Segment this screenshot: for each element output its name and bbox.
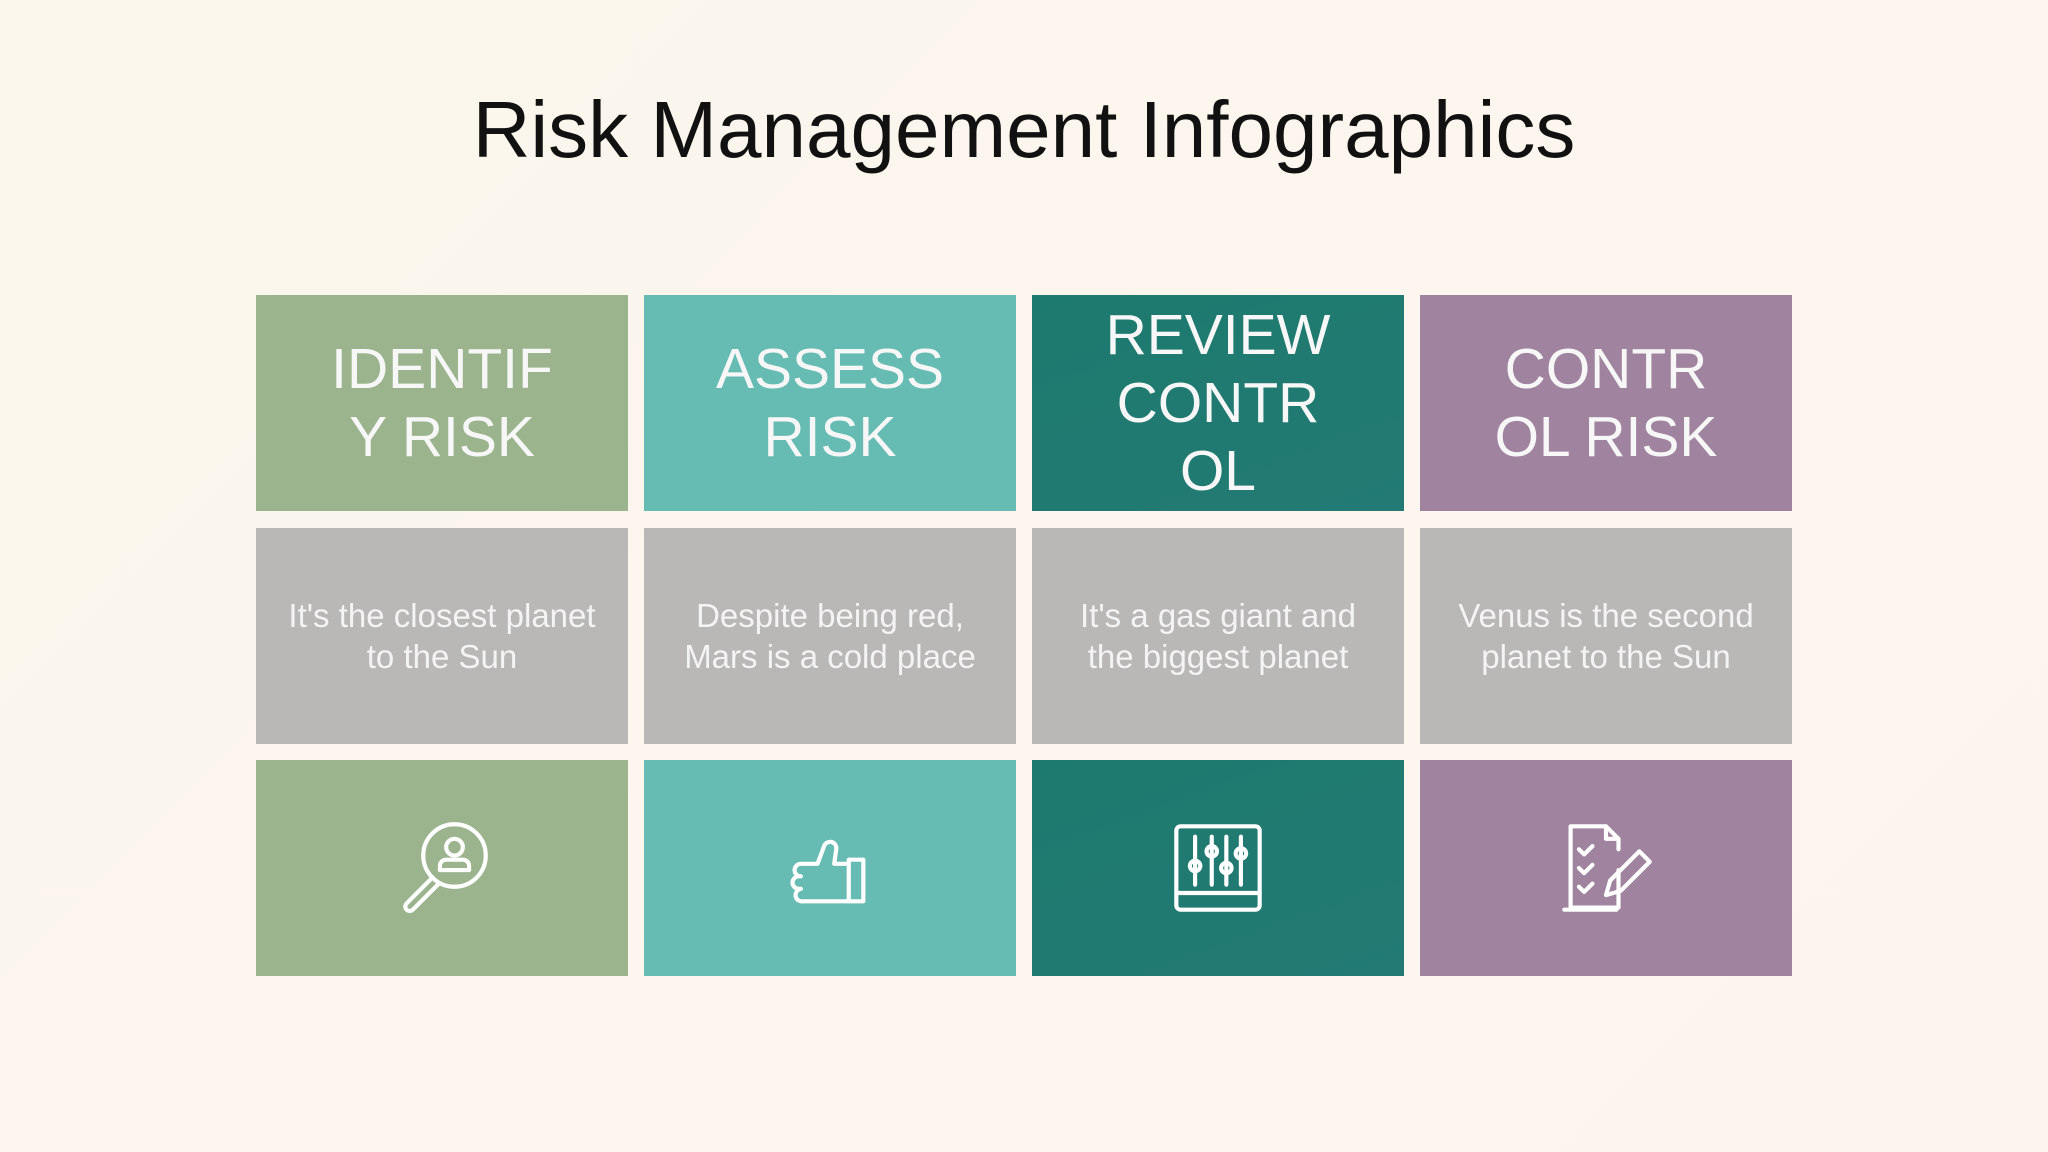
heading: identify risk: IDENTIF bbox=[331, 337, 553, 401]
heading: control risk: CONTR bbox=[1505, 337, 1707, 401]
title: Risk Management Infographics bbox=[473, 85, 1575, 174]
heading: assess risk: ASSESS bbox=[716, 337, 944, 401]
heading: identify risk bbox=[256, 295, 628, 511]
heading: control risk: OL RISK bbox=[1495, 405, 1717, 469]
text: review: It's a gas giant and bbox=[1080, 597, 1356, 634]
text: control bbox=[1420, 528, 1792, 744]
text: review bbox=[1032, 528, 1404, 744]
heading: review control bbox=[1032, 295, 1404, 511]
heading: review control: OL bbox=[1180, 439, 1256, 503]
icon panel: magnifier person bbox=[256, 760, 628, 976]
heading: assess risk bbox=[644, 295, 1016, 511]
icon panel: sliders bbox=[1032, 760, 1404, 976]
text: identify bbox=[256, 528, 628, 744]
heading: review control: REVIEW bbox=[1106, 303, 1330, 367]
heading: review control: CONTR bbox=[1117, 371, 1319, 435]
heading: identify risk: Y RISK bbox=[349, 405, 535, 469]
text: identify: It's the closest planet bbox=[288, 597, 596, 634]
text: assess: Despite being red, bbox=[696, 597, 964, 634]
text: assess bbox=[644, 528, 1016, 744]
text: assess: Mars is a cold place bbox=[684, 638, 976, 675]
heading: control risk bbox=[1420, 295, 1792, 511]
heading: assess risk: RISK bbox=[763, 405, 897, 469]
icon panel: checklist pencil bbox=[1420, 760, 1792, 976]
text: identify: to the Sun bbox=[367, 638, 517, 675]
icon panel: thumbs up bbox=[644, 760, 1016, 976]
text: review: the biggest planet bbox=[1088, 638, 1348, 675]
text: control: Venus is the second bbox=[1458, 597, 1754, 634]
text: control: planet to the Sun bbox=[1481, 638, 1731, 675]
